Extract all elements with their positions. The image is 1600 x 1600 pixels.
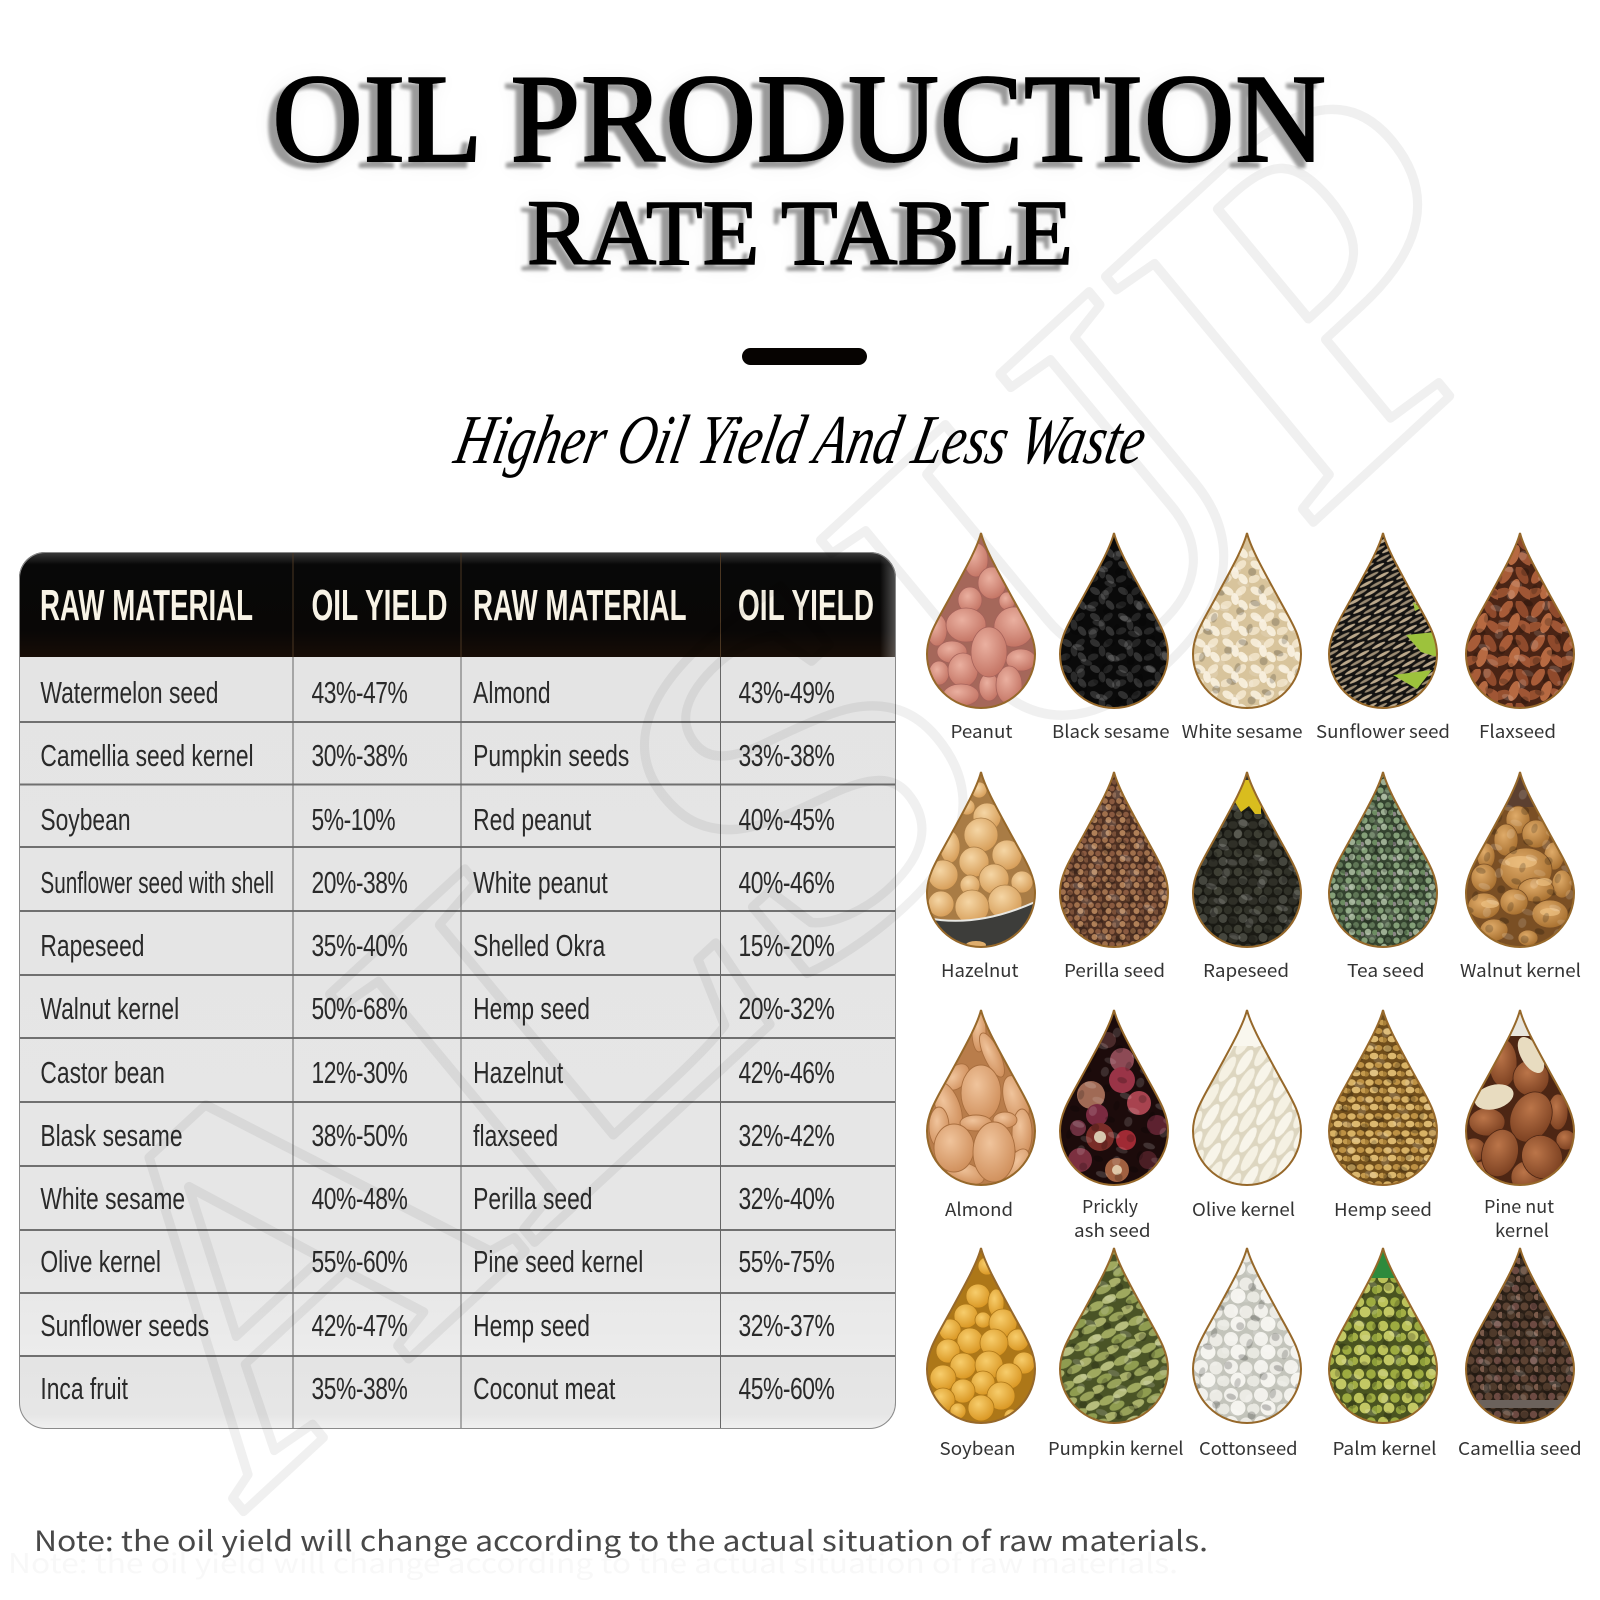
row 6: Hemp seed — [473, 991, 590, 1026]
drop card: White sesame — [1182, 533, 1303, 744]
row 9: Perilla seed — [473, 1181, 592, 1216]
icon: black sesame drop — [1060, 533, 1168, 708]
icon: walnut kernel drop — [1466, 772, 1574, 947]
row 10: Olive kernel — [40, 1244, 161, 1279]
row 2: 30%-38% — [311, 738, 408, 773]
label: Peanut — [950, 718, 1013, 744]
table header row: RAW MATERIAL — [473, 581, 686, 630]
row 11: Sunflower seeds — [40, 1308, 209, 1343]
row 11 — [40, 1308, 835, 1343]
title line 2: RATE TABLE — [527, 182, 1073, 285]
row 2: Pumpkin seeds — [473, 738, 629, 773]
row 3 — [40, 802, 835, 837]
row 6 — [40, 991, 835, 1026]
label: Perilla seed — [1064, 957, 1165, 983]
row 8 — [40, 1118, 835, 1153]
row 12: Inca fruit — [40, 1371, 128, 1406]
label: Pine nut — [1484, 1193, 1554, 1219]
row 3: Red peanut — [473, 802, 592, 837]
row 10: 55%-60% — [311, 1244, 408, 1279]
drop card: Tea seed — [1329, 772, 1437, 983]
row 3: 5%-10% — [311, 802, 395, 837]
row 1: Watermelon seed — [40, 675, 219, 710]
row 9: 32%-40% — [738, 1181, 835, 1216]
drop card: Pumpkin kernel — [1048, 1248, 1184, 1461]
label — [1484, 1193, 1554, 1243]
drop card: Rapeseed — [1193, 772, 1301, 983]
label: Walnut kernel — [1460, 957, 1581, 983]
label: Camellia seed — [1458, 1435, 1582, 1461]
table header row: OIL YIELD — [738, 581, 874, 630]
table header row — [40, 581, 874, 630]
row 7: 12%-30% — [311, 1055, 408, 1090]
table body background — [19, 552, 896, 1429]
panel: oil yield table — [19, 552, 896, 1429]
row 11: Hemp seed — [473, 1308, 590, 1343]
row 2: 33%-38% — [738, 738, 835, 773]
label: Palm kernel — [1332, 1435, 1436, 1461]
drop card: Black sesame — [1052, 533, 1170, 744]
drop card: Cottonseed — [1193, 1248, 1301, 1461]
icon: camellia seed drop — [1466, 1248, 1574, 1423]
row 11: 42%-47% — [311, 1308, 408, 1343]
row 7: Castor bean — [40, 1055, 165, 1090]
row 11: 32%-37% — [738, 1308, 835, 1343]
row 6: 50%-68% — [311, 991, 408, 1026]
row 5 — [40, 928, 835, 963]
icon: prickly ash seed drop — [1060, 1010, 1168, 1185]
drop card: Prickly ash seed — [1060, 1010, 1168, 1243]
row 4: 20%-38% — [311, 865, 408, 900]
row 4: White peanut — [473, 865, 608, 900]
row 8: 38%-50% — [311, 1118, 408, 1153]
label: ash seed — [1074, 1217, 1151, 1243]
row 3: Soybean — [40, 802, 131, 837]
row 2 — [40, 738, 835, 773]
faint note ghost: Note: the oil yield will change according to the actual situation of raw materials. — [8, 1542, 1178, 1581]
drop card: Almond — [927, 1010, 1035, 1222]
row 10: Pine seed kernel — [473, 1244, 643, 1279]
table rows — [40, 675, 835, 1406]
row 5: Rapeseed — [40, 928, 145, 963]
icon: pine nut kernel drop — [1462, 1010, 1576, 1193]
row 6: Walnut kernel — [40, 991, 179, 1026]
label: Hazelnut — [941, 957, 1019, 983]
drop card: Hemp seed — [1329, 1010, 1437, 1222]
row 1: 43%-49% — [738, 675, 835, 710]
icon: hemp seed drop — [1329, 1010, 1437, 1185]
drop card: Hazelnut — [927, 772, 1035, 983]
icon: rapeseed drop — [1193, 772, 1301, 947]
row 8: 32%-42% — [738, 1118, 835, 1153]
label: Rapeseed — [1203, 957, 1289, 983]
row 1: 43%-47% — [311, 675, 408, 710]
drop card: Peanut — [927, 533, 1041, 744]
row 10 — [40, 1244, 835, 1279]
icon: palm kernel drop — [1329, 1248, 1437, 1423]
row 7 — [40, 1055, 835, 1090]
table header row: RAW MATERIAL — [40, 581, 253, 630]
row 8: Blask sesame — [40, 1118, 183, 1153]
panel: seed drops grid — [927, 533, 1582, 1461]
row 4: 40%-46% — [738, 865, 835, 900]
row 5: 35%-40% — [311, 928, 408, 963]
row 6: 20%-32% — [738, 991, 835, 1026]
label: Tea seed — [1347, 957, 1424, 983]
icon: hazelnut drop — [927, 772, 1035, 949]
subtitle: Higher Oil Yield And Less Waste — [448, 402, 1153, 479]
title line 1: OIL PRODUCTION — [272, 50, 1326, 189]
icon: sunflower seed drop — [1329, 533, 1437, 708]
row 7: Hazelnut — [473, 1055, 564, 1090]
divider bar — [742, 348, 867, 365]
drop card: Perilla seed — [1060, 772, 1168, 983]
drop card: Sunflower seed — [1316, 533, 1450, 744]
row 1 — [40, 675, 835, 710]
icon: pumpkin kernel drop — [1060, 1248, 1168, 1423]
row 5: 15%-20% — [738, 928, 835, 963]
drop card: Flaxseed — [1466, 533, 1574, 744]
label: Black sesame — [1052, 718, 1170, 744]
label: Almond — [945, 1196, 1013, 1222]
row 1: Almond — [473, 675, 551, 710]
drop card: Pine nut kernel — [1462, 1010, 1576, 1243]
label: Prickly — [1082, 1193, 1139, 1219]
icon: olive kernel drop — [1193, 1010, 1301, 1185]
icon: cottonseed drop — [1193, 1248, 1301, 1423]
icon: tea seed drop — [1329, 772, 1437, 947]
row 10: 55%-75% — [738, 1244, 835, 1279]
row 5: Shelled Okra — [473, 928, 606, 963]
row 12: Coconut meat — [473, 1371, 616, 1406]
label: kernel — [1495, 1217, 1549, 1243]
note: Note: the oil yield will change according to the actual situation of raw materials. — [34, 1520, 1208, 1560]
label — [1074, 1193, 1151, 1243]
row 2: Camellia seed kernel — [40, 738, 254, 773]
icon: peanut drop — [927, 533, 1041, 708]
row 9 — [40, 1181, 835, 1216]
drop card: Camellia seed — [1458, 1248, 1582, 1461]
row 7: 42%-46% — [738, 1055, 835, 1090]
row 12: 45%-60% — [738, 1371, 835, 1406]
label: White sesame — [1182, 718, 1303, 744]
label: Pumpkin kernel — [1048, 1435, 1184, 1461]
label: Soybean — [940, 1435, 1016, 1461]
row 9: 40%-48% — [311, 1181, 408, 1216]
label: Flaxseed — [1479, 718, 1556, 744]
drop card: Palm kernel — [1329, 1248, 1437, 1461]
icon: soybean drop — [927, 1248, 1035, 1423]
drop card: Walnut kernel — [1460, 772, 1581, 983]
drop card: Olive kernel — [1192, 1010, 1301, 1222]
label: Hemp seed — [1334, 1196, 1432, 1222]
row 3: 40%-45% — [738, 802, 835, 837]
row 8: flaxseed — [473, 1118, 558, 1153]
label: Sunflower seed — [1316, 718, 1450, 744]
row 12: 35%-38% — [311, 1371, 408, 1406]
row 4: Sunflower seed with shell — [40, 865, 274, 900]
label: Olive kernel — [1192, 1196, 1295, 1222]
row 12 — [40, 1371, 835, 1406]
drop card: Soybean — [927, 1248, 1035, 1461]
label: Cottonseed — [1199, 1435, 1298, 1461]
icon: almond drop — [927, 1010, 1035, 1189]
table header row: OIL YIELD — [312, 581, 448, 630]
icon: white sesame drop — [1193, 533, 1301, 708]
icon: flaxseed drop — [1466, 533, 1574, 708]
icon: perilla seed drop — [1060, 772, 1168, 947]
row 9: White sesame — [40, 1181, 185, 1216]
row 4 — [40, 865, 835, 900]
